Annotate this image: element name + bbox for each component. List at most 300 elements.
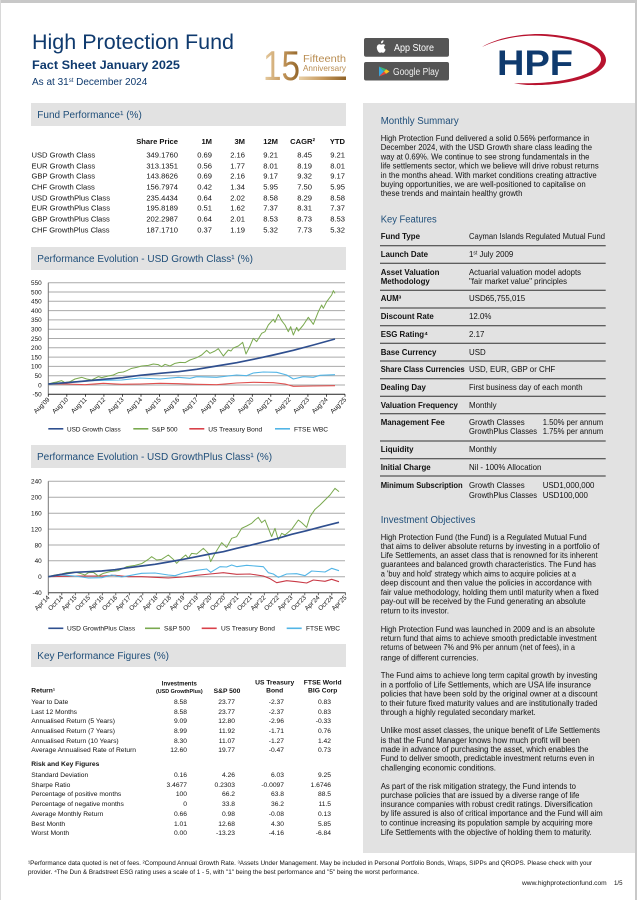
key features table: USD1,000,000 xyxy=(543,481,595,490)
key figures table: 0.00 xyxy=(174,830,187,837)
performance table: 349.1760 xyxy=(146,151,178,160)
key figures table: Last 12 Months xyxy=(31,709,78,716)
title: High Protection Fund xyxy=(32,29,234,54)
investment objectives: Fund to deliver smooth, predictable investment returns even in xyxy=(381,754,594,763)
performance table: GBP Growth Class xyxy=(32,172,95,181)
panel: performance evolution USD GrowthPlus xyxy=(31,445,349,632)
key figures table: -0.0097 xyxy=(261,782,284,789)
investment objectives: Unlike most asset classes, the unique benefit of Life Settlements xyxy=(381,726,600,735)
key figures table: 0.76 xyxy=(318,728,331,735)
key figures table: -1.27 xyxy=(269,738,284,745)
key features table: 12.0% xyxy=(469,312,491,321)
line chart: USD GrowthPlus Class: Apr'14 xyxy=(34,594,52,612)
investment objectives: The Fund aims to achieve long term capital growth by investing xyxy=(381,671,597,680)
key figures table: -4.16 xyxy=(269,830,284,837)
line chart: USD Growth Class: Aug'25 xyxy=(329,396,348,415)
performance table: 8.29 xyxy=(297,194,312,203)
performance table: 7.73 xyxy=(297,226,312,235)
performance table: 0.64 xyxy=(197,215,212,224)
performance table: 8.19 xyxy=(297,162,312,171)
key figures table: Return¹ xyxy=(31,688,56,694)
investment objectives: is that the Fund Manager knows how much profit will been xyxy=(381,736,580,745)
key figures table: Risk and Key Figures xyxy=(31,761,100,768)
heading xyxy=(31,247,346,270)
key figures table: 0.83 xyxy=(318,709,331,716)
line chart: USD Growth Class: Aug'23 xyxy=(292,396,311,415)
investment objectives: that aims to deliver absolute returns by investing in a portfolio of xyxy=(381,542,600,551)
monthly summary: December 2024, with the USD Growth share class leading the xyxy=(381,143,593,152)
footnotes xyxy=(28,860,592,876)
key figures table: 4.30 xyxy=(271,821,284,828)
performance table: 8.73 xyxy=(297,215,312,224)
investment objectives: policies that have been sold by the original owner at a discount xyxy=(381,690,598,698)
line chart: USD GrowthPlus Class: Oct'22 xyxy=(263,594,281,612)
investment objectives: As part of the risk mitigation strategy, the Fund intends to xyxy=(381,782,577,791)
icon: HPF logo: HPF xyxy=(497,44,573,83)
performance table: CHF GrowthPlus Class xyxy=(32,226,110,235)
key features table: Asset Valuation xyxy=(381,268,440,277)
key features table: Cayman Islands Regulated Mutual Fund xyxy=(469,232,605,241)
key features table: Launch Date xyxy=(381,250,429,259)
performance table: 0.64 xyxy=(197,194,212,203)
line chart: USD GrowthPlus Class: Apr'21 xyxy=(223,594,241,612)
key features table: Liquidity xyxy=(381,445,414,454)
investment objectives: High Protection Fund was launched in 2009 and is an absolute xyxy=(381,625,596,634)
investment objectives: return fund that aims to achieve smooth predictable investment xyxy=(381,634,597,643)
key figures table xyxy=(31,680,342,837)
investment objectives: made in advance of purchasing the asset, which enables the xyxy=(381,745,589,754)
key features table: Valuation Frequency xyxy=(381,401,458,410)
line chart: USD Growth Class: 0 xyxy=(38,382,42,389)
investment objectives: pay-out will be received by the Fund generating an absolute xyxy=(381,597,586,606)
key features table: GrowthPlus Classes xyxy=(469,427,537,436)
chart legend: US Treasury Bond xyxy=(208,426,263,434)
line chart: USD Growth Class: 400 xyxy=(31,308,42,315)
performance table: 0.42 xyxy=(197,183,212,192)
line chart: USD Growth Class: 350 xyxy=(31,317,42,324)
key features table: Monthly xyxy=(469,401,497,410)
line chart: USD Growth Class: Aug'16 xyxy=(162,396,182,415)
key figures table: Year to Date xyxy=(31,699,69,706)
key figures table: 12.80 xyxy=(218,718,235,725)
key features table: USD xyxy=(469,348,486,357)
key figures table: 100 xyxy=(176,791,187,798)
line chart: USD GrowthPlus Class: 80 xyxy=(35,542,42,549)
line chart: USD GrowthPlus Class xyxy=(31,479,349,632)
key figures table: -2.37 xyxy=(269,699,284,706)
chart legend: S&P 500 xyxy=(152,426,178,434)
performance table: 7.50 xyxy=(297,183,312,192)
footer url and page number: www.highprotectionfund.com xyxy=(521,880,607,887)
performance table: 8.58 xyxy=(263,194,278,203)
key figures table: BIG Corp xyxy=(308,688,337,695)
key figures table: 1.6746 xyxy=(311,782,331,789)
icon: App Store button xyxy=(364,38,449,57)
key figures table: Best Month xyxy=(31,821,65,828)
key figures table: Worst Month xyxy=(31,830,69,837)
key figures table: 4.26 xyxy=(222,772,235,779)
line chart: USD Growth Class: Aug'18 xyxy=(199,396,219,415)
key figures table: Bond xyxy=(266,688,283,695)
performance table: 0.69 xyxy=(197,151,212,160)
performance table: USD Growth Class xyxy=(32,151,95,160)
monthly summary: life settlements sector, which we believe will drive robust returns xyxy=(381,162,599,171)
performance table: GBP GrowthPlus Class xyxy=(32,215,110,224)
line chart: USD Growth Class xyxy=(31,280,348,434)
investment objectives: insurance companies with robust credit ratings. Diversification xyxy=(381,800,593,809)
line chart: USD GrowthPlus Class: Apr'17 xyxy=(115,594,133,612)
key figures table: Annualised Return (5 Years) xyxy=(31,718,115,725)
key features table: "fair market value" principles xyxy=(469,277,567,286)
investment objectives xyxy=(381,515,603,837)
key figures table: 11.07 xyxy=(219,738,235,745)
performance table xyxy=(32,137,346,235)
line chart: USD GrowthPlus Class: Oct'20 xyxy=(209,594,227,612)
key figures table: 3.4677 xyxy=(167,782,187,789)
chart legend: FTSE WBC xyxy=(294,426,328,434)
investment objectives: return to its investor. xyxy=(381,606,449,616)
performance table: 143.8626 xyxy=(146,172,178,181)
icon: Google Play button xyxy=(364,62,449,80)
key features table: GrowthPlus Classes xyxy=(469,491,537,500)
key figures table: 23.77 xyxy=(218,709,235,716)
investment objectives: range of different currencies. xyxy=(381,654,478,662)
line chart: USD GrowthPlus Class: Oct'17 xyxy=(128,594,146,612)
key figures table: FTSE World xyxy=(304,680,342,687)
key figures table: 8.30 xyxy=(174,738,187,745)
monthly summary: way at 0.69%. We continue to see strong fundamentals in the xyxy=(380,153,590,162)
line chart: USD Growth Class: 100 xyxy=(31,364,42,371)
key features table: USD100,000 xyxy=(543,491,588,500)
key figures table: Percentage of positive months xyxy=(31,791,122,798)
icon: Google Play button: Google Play xyxy=(393,67,439,78)
line chart: USD Growth Class: Aug'15 xyxy=(144,396,163,415)
investment objectives: to their future fixed maturity values and are institutionally traded xyxy=(381,699,597,708)
performance table: 7.37 xyxy=(330,204,345,213)
footer url and page number: 1/5 xyxy=(614,880,623,887)
key figures table: Standard Deviation xyxy=(31,772,88,779)
key figures table: Percentage of negative months xyxy=(31,801,125,808)
key figures table: 11.92 xyxy=(219,728,235,735)
performance table: 9.17 xyxy=(263,172,278,181)
line chart: USD GrowthPlus Class: 200 xyxy=(31,495,42,502)
key figures table: 9.09 xyxy=(174,718,187,725)
key figures table: 0.66 xyxy=(174,811,187,818)
line chart: USD Growth Class: 500 xyxy=(31,289,42,296)
key figures table: -2.96 xyxy=(269,718,284,725)
key figures table: 0.98 xyxy=(222,811,235,818)
key figures table: 9.25 xyxy=(318,772,331,779)
performance table: 1.34 xyxy=(230,183,245,192)
line chart: USD Growth Class: Aug'20 xyxy=(237,396,256,415)
key features table: Share Class Currencies xyxy=(381,365,465,374)
key features table: Nil - 100% Allocation xyxy=(469,463,541,472)
line chart: USD GrowthPlus Class: 160 xyxy=(31,510,42,518)
key figures table: 66.2 xyxy=(222,791,235,798)
line chart: USD GrowthPlus Class: Oct'23 xyxy=(290,594,308,612)
line chart: USD Growth Class: Aug'11 xyxy=(70,396,89,415)
key figures table: -13.23 xyxy=(216,830,235,837)
key figures table: Annualised Return (10 Years) xyxy=(31,738,119,745)
line chart: USD GrowthPlus Class: Apr'15 xyxy=(61,594,79,612)
panel: right sidebar xyxy=(363,103,635,853)
line chart: USD Growth Class: 300 xyxy=(31,326,42,334)
performance table: 5.95 xyxy=(263,183,278,192)
heading: Performance Evolution - USD Growth Class¹ (%) xyxy=(37,254,253,265)
key figures table: Average Monthly Return xyxy=(31,811,104,818)
key features table: Actuarial valuation model adopts xyxy=(469,268,581,277)
line chart: USD Growth Class: Aug'14 xyxy=(125,396,144,415)
key features table: USD65,755,015 xyxy=(469,294,526,303)
line chart: USD Growth Class: 50 xyxy=(35,373,42,380)
line chart: USD GrowthPlus Class: Apr'23 xyxy=(277,594,295,612)
line chart: USD GrowthPlus Class: 0 xyxy=(38,574,42,581)
line chart: USD GrowthPlus Class: Oct'16 xyxy=(101,594,119,612)
performance table: 2.16 xyxy=(230,151,245,160)
performance table: 195.8189 xyxy=(146,204,178,213)
performance table: 8.53 xyxy=(263,215,278,224)
line chart: USD GrowthPlus Class: Apr'16 xyxy=(88,594,106,612)
investment objectives: returns of between 7% and 9% per annum (net of fees), in a xyxy=(381,643,576,652)
performance table: 8.01 xyxy=(330,162,345,171)
key features table: 2.17 xyxy=(469,330,484,339)
key features table: 1 xyxy=(469,250,473,259)
investment objectives: purchase policies that are issued by a diverse range of life xyxy=(381,791,580,800)
key figures table: 0 xyxy=(183,801,187,808)
as-at date: As at 31 xyxy=(32,77,69,88)
performance table: 3M xyxy=(234,137,245,146)
performance table: 8.45 xyxy=(297,151,312,160)
key features table: Initial Charge xyxy=(381,463,431,472)
line chart: USD Growth Class: Aug'19 xyxy=(218,396,237,415)
investment objectives: Life Settlements, an asset class that is renowned for its inherent xyxy=(381,551,598,560)
key figures table: 88.5 xyxy=(318,791,331,798)
line chart: USD GrowthPlus Class: Apr'20 xyxy=(196,594,214,612)
line chart: USD GrowthPlus Class: 240 xyxy=(31,479,42,486)
performance table: 5.32 xyxy=(263,226,278,235)
line chart: USD GrowthPlus Class: Oct'14 xyxy=(47,594,65,612)
key figures table: 0.16 xyxy=(174,772,187,779)
line chart: USD GrowthPlus Class: Oct'19 xyxy=(182,594,200,612)
icon: fifteenth anniversary logo: Fifteenth xyxy=(303,54,346,65)
key figures table: Investments xyxy=(162,682,197,688)
chart legend xyxy=(48,626,340,632)
key features table: Minimum Subscription xyxy=(381,481,463,490)
key figures table: 11.5 xyxy=(318,801,331,808)
line chart: USD GrowthPlus Class: 40 xyxy=(35,558,42,565)
as-at date: December 2024 xyxy=(73,77,148,88)
key figures table: -2.37 xyxy=(269,709,284,716)
performance table: CAGR² xyxy=(290,137,315,146)
key figures table: 23.77 xyxy=(218,699,235,706)
key figures table: -0.08 xyxy=(269,811,284,818)
panel: key performance figures xyxy=(31,644,346,837)
line chart: USD Growth Class: 150 xyxy=(31,354,42,361)
line chart: USD Growth Class: 200 xyxy=(31,345,42,352)
panel: performance evolution USD Growth xyxy=(31,247,348,434)
performance table: 5.32 xyxy=(330,226,345,235)
line chart: USD Growth Class: Aug'09 xyxy=(33,396,52,415)
key figures table: Annualised Return (7 Years) xyxy=(31,728,115,735)
key figures table: 5.85 xyxy=(318,821,331,828)
performance table: 5.95 xyxy=(330,183,345,192)
investment objectives: to continue increasing its population sample by acquiring more xyxy=(381,818,593,828)
key features table: Methodology xyxy=(381,277,430,286)
investment objectives: High Protection Fund (the Fund) is a Regulated Mutual Fund xyxy=(381,533,587,542)
monthly summary: Monthly Summary xyxy=(381,116,459,127)
key features table xyxy=(380,214,606,500)
key figures table: 8.58 xyxy=(174,709,187,716)
investment objectives: through a highly regulated secondary market. xyxy=(381,708,536,717)
performance table: 2.01 xyxy=(230,215,245,224)
line chart: USD GrowthPlus Class: Apr'19 xyxy=(169,594,187,612)
line chart: USD Growth Class: 250 xyxy=(31,336,42,343)
investment objectives: a 'buy and hold' strategy which aims to acquire policies at a xyxy=(381,570,577,578)
key figures table: 0.73 xyxy=(318,747,331,754)
key figures table: -1.71 xyxy=(269,728,284,735)
performance table: Share Price xyxy=(136,137,178,146)
performance table: EUR Growth Class xyxy=(32,162,95,171)
line chart: USD GrowthPlus Class: Apr'18 xyxy=(142,594,160,612)
chart legend: S&P 500 xyxy=(164,626,190,632)
subtitle: Fact Sheet January 2025 xyxy=(32,59,181,72)
panel: fund performance xyxy=(31,103,346,235)
performance table: 1M xyxy=(201,137,212,146)
line chart: USD Growth Class: 450 xyxy=(31,299,42,306)
key features table: Growth Classes xyxy=(469,418,525,427)
key figures table: 8.58 xyxy=(174,699,187,706)
performance table: 0.69 xyxy=(197,172,212,181)
monthly summary: in the months ahead. With market conditions creating attractive xyxy=(381,171,597,180)
heading: Performance Evolution - USD GrowthPlus Class¹ (%) xyxy=(37,452,272,463)
key features table: Monthly xyxy=(469,445,497,454)
performance table: 2.02 xyxy=(230,194,245,203)
investment objectives: deep discount and then value the policies in accordance with xyxy=(381,578,592,588)
investment objectives: fair value methodology, holding them until maturity when a fixed xyxy=(381,588,599,597)
line chart: USD GrowthPlus Class: Oct'21 xyxy=(236,594,254,612)
heading xyxy=(31,103,346,126)
performance table: 202.2987 xyxy=(146,215,178,224)
performance table: 0.56 xyxy=(197,162,212,171)
key features table: USD, EUR, GBP or CHF xyxy=(469,365,555,374)
key features table: Discount Rate xyxy=(381,312,434,321)
performance table: 235.4434 xyxy=(146,194,178,203)
performance table: 8.31 xyxy=(297,204,312,213)
performance table: 1.77 xyxy=(230,162,245,171)
investment objectives: guarantees and balanced growth characteristics. The Fund has xyxy=(381,560,596,569)
key features table: Growth Classes xyxy=(469,481,525,490)
performance table: 313.1351 xyxy=(146,162,178,171)
icon: HPF logo xyxy=(482,34,606,85)
line chart: USD Growth Class: -50 xyxy=(32,392,42,399)
performance table: USD GrowthPlus Class xyxy=(32,194,110,203)
monthly summary xyxy=(380,116,599,198)
performance table: 187.1710 xyxy=(146,226,178,235)
footnotes: ¹Performance data quoted is net of fees. ²Compound Annual Growth Rate. ³Assets Under Management. May be included in Personal Portfolio Bonds, Wraps, SIPPs and QROPS. Please check with your xyxy=(28,860,592,867)
key figures table: -6.84 xyxy=(316,830,331,837)
key figures table: 0.83 xyxy=(318,699,331,706)
key figures table: S&P 500 xyxy=(214,688,241,695)
key features table: First business day of each month xyxy=(469,383,582,392)
line chart: USD GrowthPlus Class: Oct'24 xyxy=(317,594,335,612)
investment objectives: Life Settlements with the objective of holding them to maturity. xyxy=(381,828,592,837)
line chart: USD GrowthPlus Class: 120 xyxy=(31,526,42,533)
performance table: 0.37 xyxy=(197,226,212,235)
performance table: 8.01 xyxy=(263,162,278,171)
line chart: USD GrowthPlus Class: Oct'15 xyxy=(74,594,92,612)
chart legend: USD GrowthPlus Class xyxy=(67,626,136,632)
line chart: USD Growth Class: Aug'12 xyxy=(88,396,107,415)
icon: fifteenth anniversary logo xyxy=(263,42,347,89)
performance table: YTD xyxy=(330,137,346,146)
performance table: 12M xyxy=(263,137,278,146)
key figures table: 36.2 xyxy=(271,801,284,808)
key features table: AUM³ xyxy=(381,294,402,303)
key figures table: 63.8 xyxy=(271,791,284,798)
performance table: 1.62 xyxy=(230,204,245,213)
icon: fifteenth anniversary logo: Anniversary xyxy=(303,64,347,73)
key figures table: 8.99 xyxy=(174,728,187,735)
key figures table: 0.2303 xyxy=(215,782,235,789)
key figures table: -0.47 xyxy=(269,747,284,754)
key features table: Management Fee xyxy=(381,418,445,427)
investment objectives: challenging economic conditions. xyxy=(381,764,496,772)
line chart: USD Growth Class: Aug'21 xyxy=(255,396,274,415)
key features table: 1.50% per annum xyxy=(543,418,604,427)
line chart: USD Growth Class: Aug'10 xyxy=(51,396,70,415)
key figures table: 12.68 xyxy=(218,821,235,828)
key figures table: (USD GrowthPlus) xyxy=(156,689,203,695)
performance table: 156.7974 xyxy=(146,183,178,192)
performance table: 2.16 xyxy=(230,172,245,181)
performance table: EUR GrowthPlus Class xyxy=(32,204,110,213)
performance table: 9.17 xyxy=(330,172,345,181)
footnotes: provider. ⁴The Dun & Bradstreet ESG rating uses a scale of 1 - 5, with "1" being the best performance and "5" being the worst performance. xyxy=(28,869,419,876)
key features table: Key Features xyxy=(381,214,437,226)
line chart: USD GrowthPlus Class: Apr'22 xyxy=(250,594,268,612)
performance table: 9.32 xyxy=(297,172,312,181)
performance table: 8.53 xyxy=(330,215,345,224)
key features table: ESG Rating⁴ xyxy=(381,330,428,339)
key figures table: -0.33 xyxy=(316,718,331,725)
key figures table: 6.03 xyxy=(271,772,284,779)
performance table: 0.51 xyxy=(197,204,212,213)
key figures table: 19.77 xyxy=(218,747,235,754)
key features table: 1.75% per annum xyxy=(543,427,604,436)
investment objectives: Investment Objectives xyxy=(381,515,475,526)
key figures table: 12.60 xyxy=(170,747,187,754)
line chart: USD GrowthPlus Class: Apr'24 xyxy=(304,594,322,612)
key figures table: US Treasury xyxy=(255,680,294,687)
performance table: 7.37 xyxy=(263,204,278,213)
key features table: st xyxy=(473,250,478,256)
performance table: CHF Growth Class xyxy=(32,183,95,192)
chart legend: USD Growth Class xyxy=(67,426,121,434)
line chart: USD GrowthPlus Class: Apr'25 xyxy=(331,594,349,612)
heading: Key Performance Figures (%) xyxy=(37,651,169,662)
key figures table: 0.13 xyxy=(318,811,331,818)
key figures table: Sharpe Ratio xyxy=(31,782,71,789)
key features table: July 2009 xyxy=(477,250,514,259)
chart legend: US Treasury Bond xyxy=(221,626,275,632)
line chart: USD Growth Class: Aug'17 xyxy=(181,396,200,415)
key figures table: 1.42 xyxy=(318,738,331,745)
heading xyxy=(31,445,346,468)
key figures table: Average Annualised Rate of Return xyxy=(31,747,136,754)
investment objectives: in a portfolio of Life Settlements, which are USA life insurance xyxy=(381,680,592,690)
line chart: USD Growth Class: Aug'24 xyxy=(311,396,330,415)
key figures table: 1.01 xyxy=(174,821,187,828)
